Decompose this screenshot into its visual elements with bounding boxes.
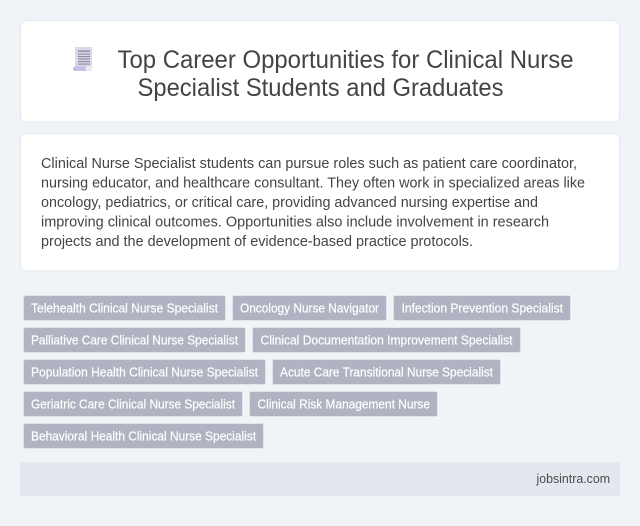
tag: Geriatric Care xyxy=(24,392,242,416)
icon: document scroll xyxy=(73,47,92,71)
tag: Infection Prevention xyxy=(394,296,570,320)
tag: Behavioral Health: Behavioral Health Clinical Nurse Specialist xyxy=(31,428,256,444)
text block: description xyxy=(41,156,585,250)
title xyxy=(118,46,574,102)
text block: description: improving clinical outcomes. Opportunities also include involvement in research xyxy=(41,214,549,230)
tag: Palliative Care: Palliative Care Clinical Nurse Specialist xyxy=(31,332,238,348)
tag: Acute Care xyxy=(272,360,500,384)
tag: Telehealth xyxy=(24,296,226,320)
tag: Clinical Documentation xyxy=(252,328,520,352)
text block: description: nursing educator, and healthcare consultant. They often work in specialized areas like xyxy=(41,176,585,192)
tag: Population Health: Population Health Clinical Nurse Specialist xyxy=(31,364,258,380)
tag: Clinical Risk: Clinical Risk Management Nurse xyxy=(258,396,430,412)
title: Specialist Students and Graduates xyxy=(138,74,504,102)
tag: Palliative Care xyxy=(24,328,246,352)
tag: Infection Prevention: Infection Prevention Specialist xyxy=(402,300,563,316)
tag: Clinical Risk xyxy=(250,392,438,416)
tag: Population Health xyxy=(24,360,266,384)
tag: Acute Care: Acute Care Transitional Nurse Specialist xyxy=(280,364,493,380)
text block: description: projects and the development of evidence-based practice protocols. xyxy=(41,234,473,250)
tag: Geriatric Care: Geriatric Care Clinical Nurse Specialist xyxy=(31,396,235,412)
title: Top Career Opportunities for Clinical Nurse xyxy=(118,46,574,74)
tag list xyxy=(24,296,570,448)
footer source text: jobsintra.com xyxy=(536,471,610,486)
tag: Oncology xyxy=(232,296,386,320)
panel: description xyxy=(20,134,620,271)
footer xyxy=(20,462,620,496)
text block: description: Clinical Nurse Specialist students can pursue roles such as patient care coordinator, xyxy=(41,156,577,172)
tag: Telehealth: Telehealth Clinical Nurse Specialist xyxy=(31,300,218,316)
tag: Clinical Documentation: Clinical Documentation Improvement Specialist xyxy=(260,332,513,348)
tag: Oncology: Oncology Nurse Navigator xyxy=(240,300,380,316)
tag: Behavioral Health xyxy=(24,424,264,448)
panel: header xyxy=(20,20,620,122)
text block: description: oncology, pediatrics, or critical care, providing advanced nursing expertise and xyxy=(41,195,538,211)
